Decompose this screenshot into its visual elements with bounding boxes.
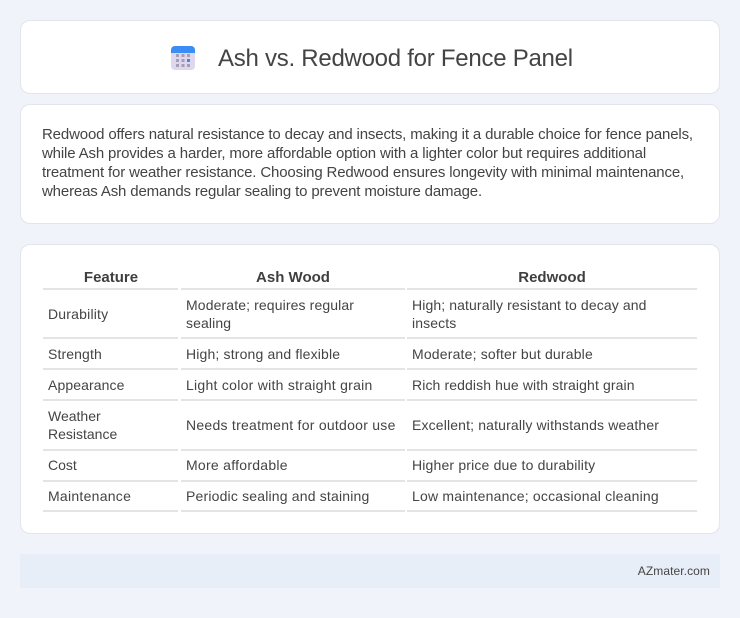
ash maintenance: Periodic sealing and staining <box>186 488 369 504</box>
redwood weather resistance: Excellent; naturally withstands weather <box>412 417 659 433</box>
row: weather resistance: Weather <box>48 408 101 424</box>
row: strength: Strength <box>48 346 102 362</box>
summary text: Redwood offers natural resistance to decay and insects, making it a durable choice for fence panels, <box>42 126 693 143</box>
redwood cost: Higher price due to durability <box>412 457 595 473</box>
title: Ash vs. Redwood for Fence Panel <box>218 45 573 72</box>
comparison table card <box>20 244 720 534</box>
row: appearance: Appearance <box>48 377 125 393</box>
summary text: while Ash provides a harder, more affordable option with a lighter color but requires additional <box>42 145 646 162</box>
row: weather resistance: Resistance <box>48 426 117 442</box>
summary text: treatment for weather resistance. Choosing Redwood ensures longevity with minimal maintenance, <box>42 164 684 181</box>
redwood strength: Moderate; softer but durable <box>412 346 593 362</box>
ash durability: sealing <box>186 315 231 331</box>
ash weather resistance: Needs treatment for outdoor use <box>186 417 396 433</box>
table header: ash wood: Ash Wood <box>256 269 330 286</box>
ash durability: Moderate; requires regular <box>186 297 354 313</box>
row: cost: Cost <box>48 457 77 473</box>
row: durability: Durability <box>48 306 108 322</box>
summary text <box>42 126 693 200</box>
ash durability <box>186 297 354 331</box>
ash strength: High; strong and flexible <box>186 346 340 362</box>
row: maintenance: Maintenance <box>48 488 131 504</box>
redwood durability: insects <box>412 315 456 331</box>
ash cost: More affordable <box>186 457 288 473</box>
footer credit: AZmater.com <box>638 564 710 578</box>
table header: redwood: Redwood <box>518 269 586 286</box>
row: weather resistance <box>48 408 117 442</box>
redwood durability <box>412 297 647 331</box>
ash appearance: Light color with straight grain <box>186 377 373 393</box>
redwood appearance: Rich reddish hue with straight grain <box>412 377 635 393</box>
title card <box>20 20 720 94</box>
footer bar <box>20 554 720 588</box>
summary card <box>20 104 720 224</box>
redwood durability: High; naturally resistant to decay and <box>412 297 647 313</box>
summary text: whereas Ash demands regular sealing to prevent moisture damage. <box>42 183 482 200</box>
icon: calendar <box>171 46 195 70</box>
redwood maintenance: Low maintenance; occasional cleaning <box>412 488 659 504</box>
table header: feature: Feature <box>84 269 138 286</box>
